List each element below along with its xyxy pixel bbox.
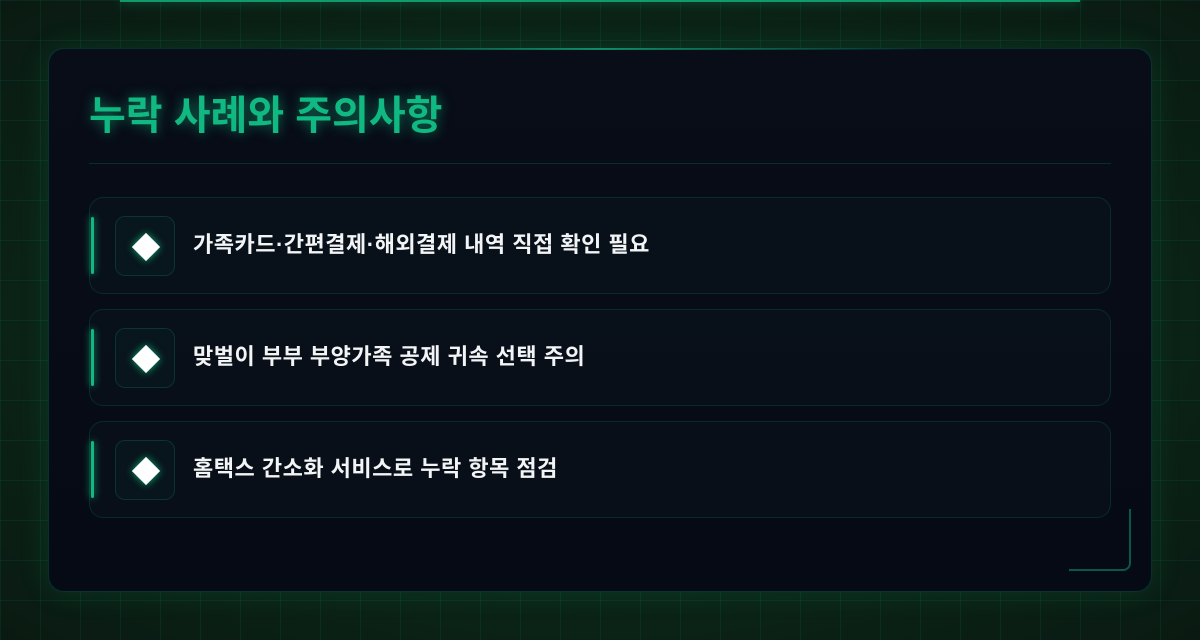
item 1: [89, 197, 1111, 294]
corner bracket: [1069, 509, 1131, 571]
item 3: [89, 421, 1111, 518]
title: 누락 사례와 주의사항: [89, 94, 442, 138]
text 3: 홈택스 간소화 서비스로 누락 항목 점검: [193, 456, 558, 481]
icon: diamond: [115, 216, 175, 276]
text 1: 가족카드·간편결제·해외결제 내역 직접 확인 필요: [193, 232, 650, 257]
text 2: 맞벌이 부부 부양가족 공제 귀속 선택 주의: [193, 344, 585, 369]
panel top accent line: [269, 48, 929, 50]
panel: main card: [48, 48, 1152, 592]
item 2: [89, 309, 1111, 406]
icon: diamond: [115, 440, 175, 500]
icon: diamond: [115, 328, 175, 388]
top glow line: [120, 0, 1080, 2]
